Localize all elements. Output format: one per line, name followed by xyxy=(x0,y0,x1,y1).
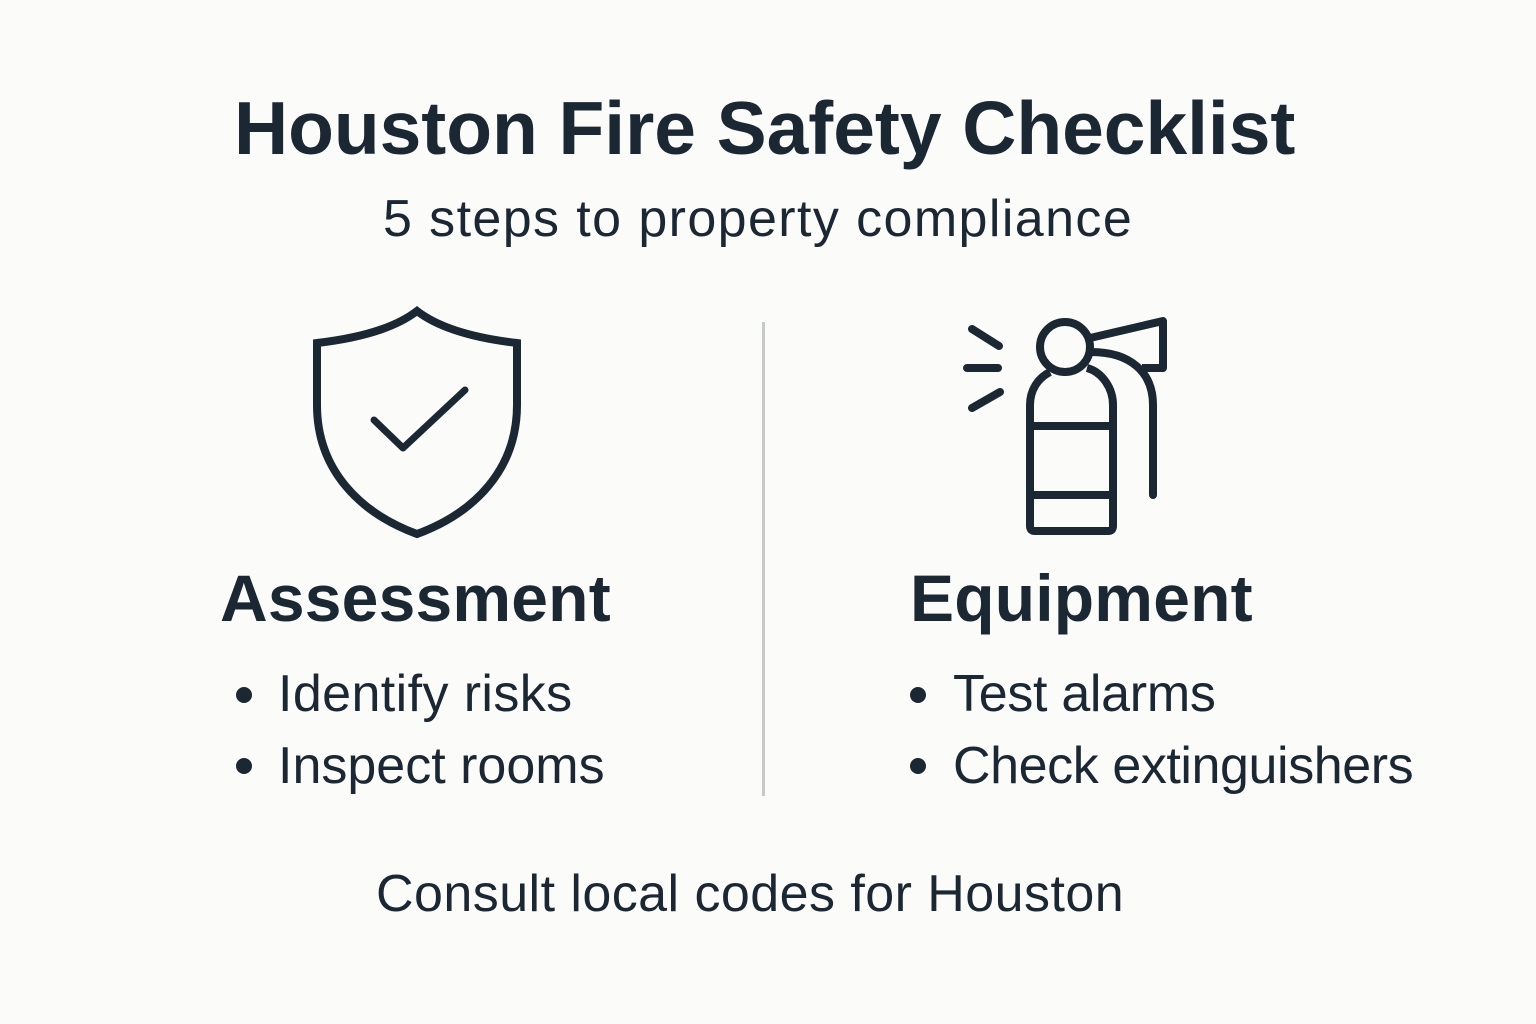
bullet list: assessment xyxy=(236,665,605,795)
bullet list: equipment: Test alarms xyxy=(953,665,1216,723)
icon: shield with check xyxy=(313,306,521,538)
divider xyxy=(762,322,765,796)
bullet list: assessment: Identify risks xyxy=(278,665,573,723)
panel: equipment xyxy=(910,561,1413,795)
subtitle: 5 steps to property compliance xyxy=(383,190,1133,248)
heading: assessment: Assessment xyxy=(220,561,611,635)
panel: assessment xyxy=(220,561,611,795)
footer note: Consult local codes for Houston xyxy=(376,865,1124,923)
bullet list: assessment: Inspect rooms xyxy=(278,737,605,795)
icon: fire extinguisher xyxy=(963,317,1167,535)
bullet list: equipment xyxy=(910,665,1413,795)
bullet list: equipment: Check extinguishers xyxy=(953,737,1413,795)
heading: equipment: Equipment xyxy=(910,561,1253,635)
title: Houston Fire Safety Checklist xyxy=(234,86,1295,170)
